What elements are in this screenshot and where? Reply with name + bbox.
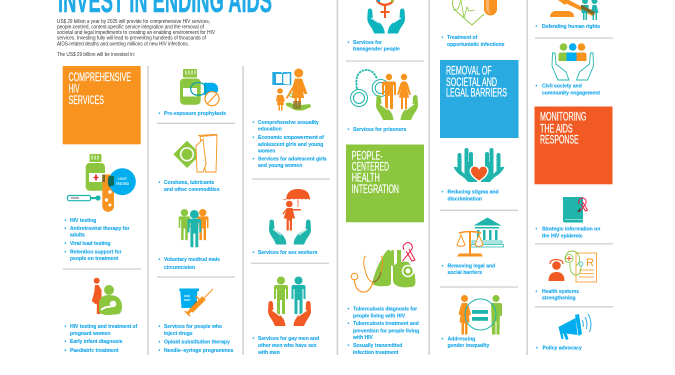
text: HIV testing list: HIV testing [70,218,96,224]
text: gay men [252,336,319,356]
text: civil society: community engagement [542,91,600,97]
text: stigma: Reducing stigma and [448,190,499,196]
text: gender inequality: Addressing [448,337,475,343]
intro text: AIDS-related deaths and averting millions of new HIV infections. [57,41,189,47]
icon: three men [179,209,208,247]
text: people who inject drugs: • [158,348,160,354]
text: adolescent girls list: women [257,149,275,155]
text: pre-exposure prophylaxis: Pre-exposure prophylaxis [164,111,226,117]
text: TB list [348,307,419,356]
text: people who inject drugs [158,324,233,354]
text: legal barriers: • [442,263,444,269]
text: sex workers: • [252,250,254,256]
intro text: US$ 29 billion a year by 2025 will provide for comprehensive HIV services, [57,19,210,25]
text: legal barriers: social barriers [448,270,482,276]
text: health systems: strengthening [542,296,576,302]
panel: monitoring the AIDS response: MONITORING [540,111,586,124]
text: policy advocacy: • [536,346,538,352]
icon: mother and child [92,278,122,315]
text: adolescent girls list: education [258,127,282,133]
text: civil society: • [536,84,538,90]
text: people who inject drugs: Opioid substitution therapy [164,340,230,346]
text: human rights: Defending human rights [542,24,600,30]
icon: civil society hands [552,43,594,80]
text: condoms: and other commodities [164,187,220,193]
text: HIV testing list: Retention support for [70,250,122,256]
text: health systems: Health systems [542,289,579,295]
text: TB list: people living with HIV [353,314,406,320]
intro text [57,19,216,58]
icon: health systems [548,251,596,282]
text: transgender people: • [348,40,350,46]
icon: health systems: R [586,257,594,269]
text: people who inject drugs: • [158,324,160,330]
text: mother and child list: pregnant women [70,331,110,337]
text: HIV testing list: • [64,241,66,247]
panel: removal of societal and legal barriers: SOCIETAL AND [446,76,497,89]
text: HIV testing list: Antiretroviral therapy for [70,226,129,232]
text: strategic information [536,227,600,240]
icon: scale and courthouse [457,218,504,256]
text: strategic information: • [536,227,538,233]
panel: monitoring the AIDS response: RESPONSE [540,133,579,146]
text: people who inject drugs: Needle–syringe programmes [164,348,233,354]
text: people who inject drugs: inject drugs [164,331,193,337]
text: people who inject drugs: Services for people who [164,324,222,330]
text: TB list: Tuberculosis treatment and [353,321,419,327]
text: circumcision [158,257,220,271]
icon: gender equality [458,295,502,334]
text: TB list: infection treatment [353,350,399,356]
text: adolescent girls list: Comprehensive sexuality [258,120,319,126]
text: mother and child list: Early infant diagnosis [70,339,123,345]
panel: monitoring the AIDS response [534,106,612,184]
text: condoms [158,180,220,193]
text: gay men: other men who have sex [258,343,317,349]
text: adolescent girls list: Services for adolescent girls [258,157,327,163]
text: strategic information: Strategic information on [542,227,600,233]
text: stigma [442,190,499,203]
text: condoms: • [158,180,160,186]
text: adolescent girls list: • [252,120,254,126]
text: TB list: • [348,343,350,349]
text: civil society [536,84,600,97]
text: TB list: • [348,307,350,313]
text: human rights: • [536,24,538,30]
icon: handcuffs and prisoners [350,70,418,120]
text: TB list: Sexually transmitted [353,343,402,349]
panel: people-centered health integration: CENTERED [352,160,389,173]
text: legal barriers [442,263,495,276]
text: opportunistic infections [442,35,505,48]
text: HIV testing list: Viral load testing [70,241,111,247]
text: gay men: • [252,336,254,342]
icon: book and ribbon [563,197,588,222]
text: strategic information: the HIV epidemic [542,234,583,240]
panel: people-centered health integration: HEALTH [352,172,380,185]
text: transgender people [348,40,400,53]
text: gender inequality [442,337,489,349]
text: adolescent girls list: and young women [258,163,302,169]
panel: comprehensive HIV services: SERVICES [68,94,104,107]
icon: PrEP pill bottle [180,69,219,106]
text: HIV testing list [64,218,129,262]
text: mother and child list: • [64,348,66,354]
icon: HIV testing: TESTED [116,182,130,186]
text: adolescent girls list: • [252,157,254,163]
text: gender inequality: • [442,337,444,343]
icon: HIV testing [68,154,136,212]
text: TB list: Tuberculosis diagnosis for [353,307,417,313]
icon: syringe and cup [179,288,213,316]
icon: gavel and people [550,0,598,20]
text: adolescent girls list: adolescent girls and young [258,142,323,148]
text: HIV testing list: adults [70,233,85,239]
text: adolescent girls list: Economic empowerment of [258,135,324,141]
text: prisoners: Services for prisoners [353,127,406,133]
icon: HIV testing: I GOT [118,177,128,181]
intro text: societal and legal impediments to creating an enabling environment for HIV [57,30,216,36]
text: transgender people: Services for [353,40,382,46]
text: HIV testing list: • [64,250,66,256]
text: mother and child list: • [64,339,66,345]
icon: condoms and lubricants [173,134,217,172]
text: gay men: Services for gay men and [258,336,319,342]
icon: opportunistic infections heart and pill [452,0,497,25]
icon: lungs, stethoscope and ribbon [351,242,416,292]
icon: hands with heart [454,148,504,182]
intro text: people-centred, context-specific service integration and the removal of [57,24,205,30]
text: condoms: Condoms, lubricants [164,180,214,186]
text: TB list: • [348,321,350,327]
text: gay men: with men [257,350,280,356]
text: mother and child list [64,324,138,354]
text: circumcision: circumcision [164,265,195,271]
text: prisoners: • [348,127,350,133]
icon: transgender symbol in hands [367,0,405,34]
text: pre-exposure prophylaxis: • [158,111,160,117]
text: adolescent girls list [252,120,327,169]
intro text: services. Investing fully will lead to preventing hundreds of thousands of [57,36,207,42]
panel: people-centered health integration: INTEGRATION [352,183,399,196]
text: transgender people: transgender people [353,47,400,53]
text: TB list: with HIV [352,335,374,341]
panel: removal of societal and legal barriers: REMOVAL OF [446,64,492,77]
text: circumcision: • [158,257,160,263]
panel: comprehensive HIV services: HIV [68,83,80,96]
panel: removal of societal and legal barriers [440,60,518,138]
text: mother and child list: • [64,324,66,330]
text: stigma: • [442,190,444,196]
text: civil society: Civil society and [542,84,582,90]
panel: monitoring the AIDS response: THE AIDS [540,122,573,135]
text: TB list: prevention for people living [353,329,419,335]
text: opportunistic infections: • [442,35,444,41]
panel: people-centered health integration: PEOPLE- [352,149,383,162]
text: legal barriers: Removing legal and [448,263,495,269]
text: HIV testing list: • [64,218,66,224]
icon: two men in hands [268,276,311,326]
text: opportunistic infections: Treatment of [447,35,478,41]
text: health systems [536,289,579,302]
icon: umbrella and sex worker in hands [269,189,311,244]
panel: comprehensive HIV services [63,66,141,144]
panel: people-centered health integration [346,144,424,222]
icon: woman, girl and book [272,68,311,110]
text: HIV testing list: • [64,226,66,232]
text: health systems: • [536,289,538,295]
text: sex workers: Services for sex workers [258,250,318,256]
panel: comprehensive HIV services: COMPREHENSIVE [68,71,131,84]
text: circumcision: Voluntary medical male [164,257,220,263]
text: policy advocacy: Policy advocacy [542,346,582,352]
text: gender inequality: gender inequality [448,343,489,349]
panel: removal of societal and legal barriers: LEGAL BARRIERS [446,87,507,100]
text: stigma: discrimination [448,197,482,203]
text: people who inject drugs: • [158,340,160,346]
text: adolescent girls list: • [252,135,254,141]
text: mother and child list: Paediatric treatment [70,348,119,354]
text: mother and child list: HIV testing and treatment of [70,324,138,330]
text: opportunistic infections: opportunistic infections [447,42,505,48]
intro text: The US$ 29 billion will be invested in: [57,52,135,58]
text: HIV testing list: people on treatment [70,256,119,262]
icon: megaphone [558,314,591,340]
